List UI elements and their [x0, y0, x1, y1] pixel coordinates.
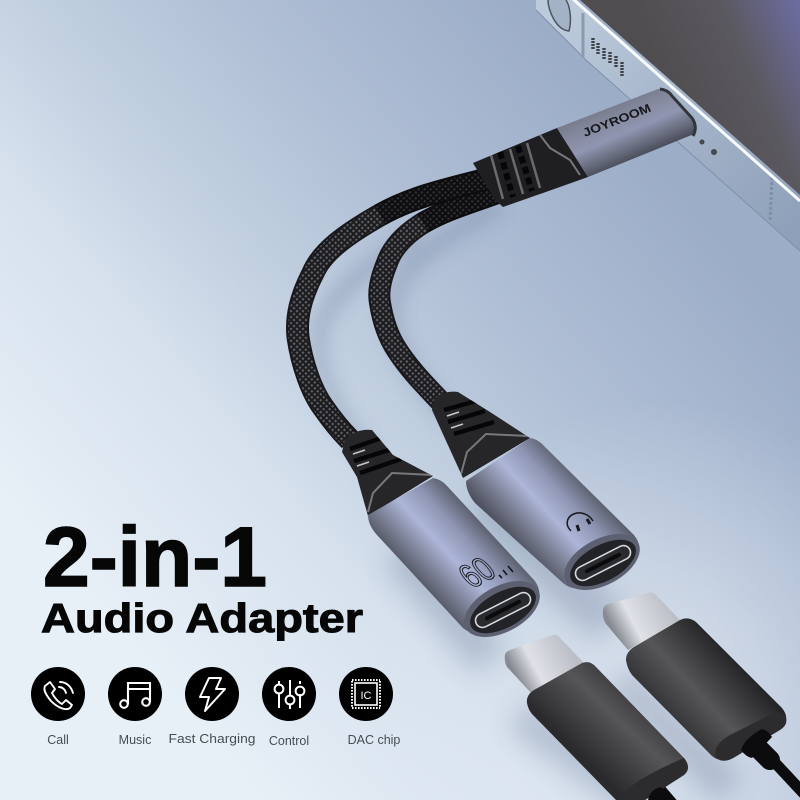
plug body — [626, 618, 786, 760]
connector rubber boot — [432, 392, 530, 478]
port face — [455, 569, 549, 649]
plug rubber boot — [473, 128, 588, 207]
USB-C plug: left — [505, 635, 688, 800]
USB-C plug: right — [603, 592, 800, 796]
phone screen body — [580, 0, 800, 195]
plug metal shell — [557, 89, 696, 177]
label: Music — [119, 733, 151, 747]
label: Call — [47, 733, 69, 747]
speaker grille — [593, 38, 622, 76]
icon: sliders — [275, 680, 304, 709]
icon: IC chip: IC — [360, 690, 372, 702]
feature: call — [31, 667, 85, 747]
icon: headphones — [567, 513, 593, 531]
icon: phone — [44, 682, 73, 709]
soft shadows under the cable and connectors — [318, 205, 730, 800]
feature: DAC chip — [339, 667, 400, 747]
label: Fast Charging — [168, 732, 256, 746]
plug tip — [603, 592, 680, 650]
feature: fast charging — [168, 667, 256, 746]
braided cable: left — [298, 178, 490, 440]
mic holes — [700, 140, 704, 144]
plug body — [527, 662, 688, 800]
connector shell — [466, 438, 639, 588]
connector rubber boot — [342, 430, 433, 516]
icon: lightning bolt — [200, 678, 225, 711]
connector shell — [368, 478, 539, 633]
plug cable — [648, 782, 672, 800]
white phone rim — [573, 0, 800, 201]
connector: headphone port — [432, 392, 649, 602]
connector: 60W port — [342, 430, 549, 649]
label: DAC chip — [348, 733, 400, 747]
plug tip — [505, 635, 585, 694]
icon: music notes — [120, 683, 150, 708]
title — [41, 510, 363, 641]
feature: control — [262, 667, 316, 748]
label: Control — [269, 734, 309, 748]
phone button — [548, 0, 570, 31]
feature: music — [108, 667, 162, 747]
phone edge — [536, 0, 800, 251]
top USB-C plug — [473, 89, 696, 207]
heading: 2-in-1: 2-in-1 — [43, 510, 267, 604]
port face — [555, 522, 649, 602]
heading: Audio Adapter: Audio Adapter — [41, 595, 363, 641]
signal bars mark — [499, 566, 513, 578]
60W label: 60 — [450, 550, 504, 595]
phone side strip — [536, 0, 800, 251]
braided cable: right — [379, 192, 500, 402]
plug cable — [765, 752, 800, 796]
brand: JOYROOM — [580, 101, 653, 140]
